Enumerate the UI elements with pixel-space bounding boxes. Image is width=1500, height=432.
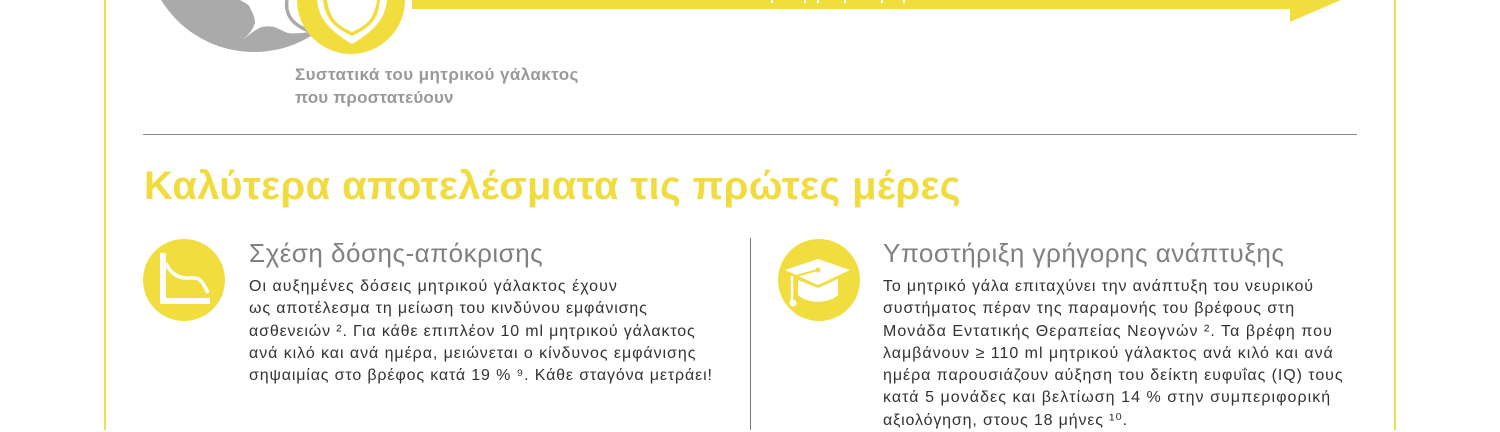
text: rapid development: Το μητρικό γάλα επιταχύνει την ανάπτυξη του νευρικού [883,278,1314,295]
text: rapid development: κατά 5 μονάδες και βελτίωση 14 % στην συμπεριφορική [883,389,1331,406]
caption: protective components: Συστατικά του μητρικού γάλακτος [295,65,579,84]
icon: mother and baby silhouette [145,0,363,52]
panel: dose response [143,238,713,384]
text: dose response: ασθενειών ². Για κάθε επιπλέον 10 ml μητρικού γάλακτος [249,323,696,340]
section divider [143,134,1357,135]
left frame border [104,0,106,430]
caption: protective components [295,65,579,107]
text: rapid development: αξιολόγηση, στους 18 μήνες ¹⁰. [883,412,1128,429]
text: rapid development [883,278,1344,429]
text: rapid development: ημέρα παρουσιάζουν αύξηση του δείκτη ευφυΐας (IQ) τους [883,367,1344,384]
heading: rapid development: Υποστήριξη γρήγορης ανάπτυξης [883,238,1284,268]
icon: dose response curve [143,239,225,321]
protective components graphic [161,0,405,54]
text: dose response: Οι αυξημένες δόσεις μητρικού γάλακτος έχουν [249,278,618,295]
text: rapid development: συστήματος πέραν της παραμονής του βρέφους στη [883,300,1295,317]
text: rapid development: Μονάδα Εντατικής Θεραπείας Νεογνών ². Τα βρέφη που [883,323,1333,340]
heading: dose response: Σχέση δόσης-απόκρισης [249,238,543,268]
title: Καλύτερα αποτελέσματα τις πρώτες μέρες [144,164,961,208]
text: dose response: ως αποτέλεσμα τη μείωση του κινδύνου εμφάνισης [249,300,648,317]
text: rapid development: λαμβάνουν ≥ 110 ml μητρικού γάλακτος ανά κιλό και ανά [883,345,1334,362]
panel: rapid development [778,238,1344,429]
text: dose response [249,278,713,384]
caption: protective components: που προστατεύουν [295,88,454,107]
text: dose response: ανά κιλό και ανά ημέρα, μειώνεται ο κίνδυνος εμφάνισης [249,345,696,362]
icon: graduation cap [778,239,860,321]
column divider [750,238,751,430]
right frame border [1394,0,1396,430]
icon: yellow shield [297,0,405,54]
yellow arrow [412,0,1341,22]
text: dose response: σηψαιμίας στο βρέφος κατά 19 % ⁹. Κάθε σταγόνα μετράει! [249,367,713,384]
